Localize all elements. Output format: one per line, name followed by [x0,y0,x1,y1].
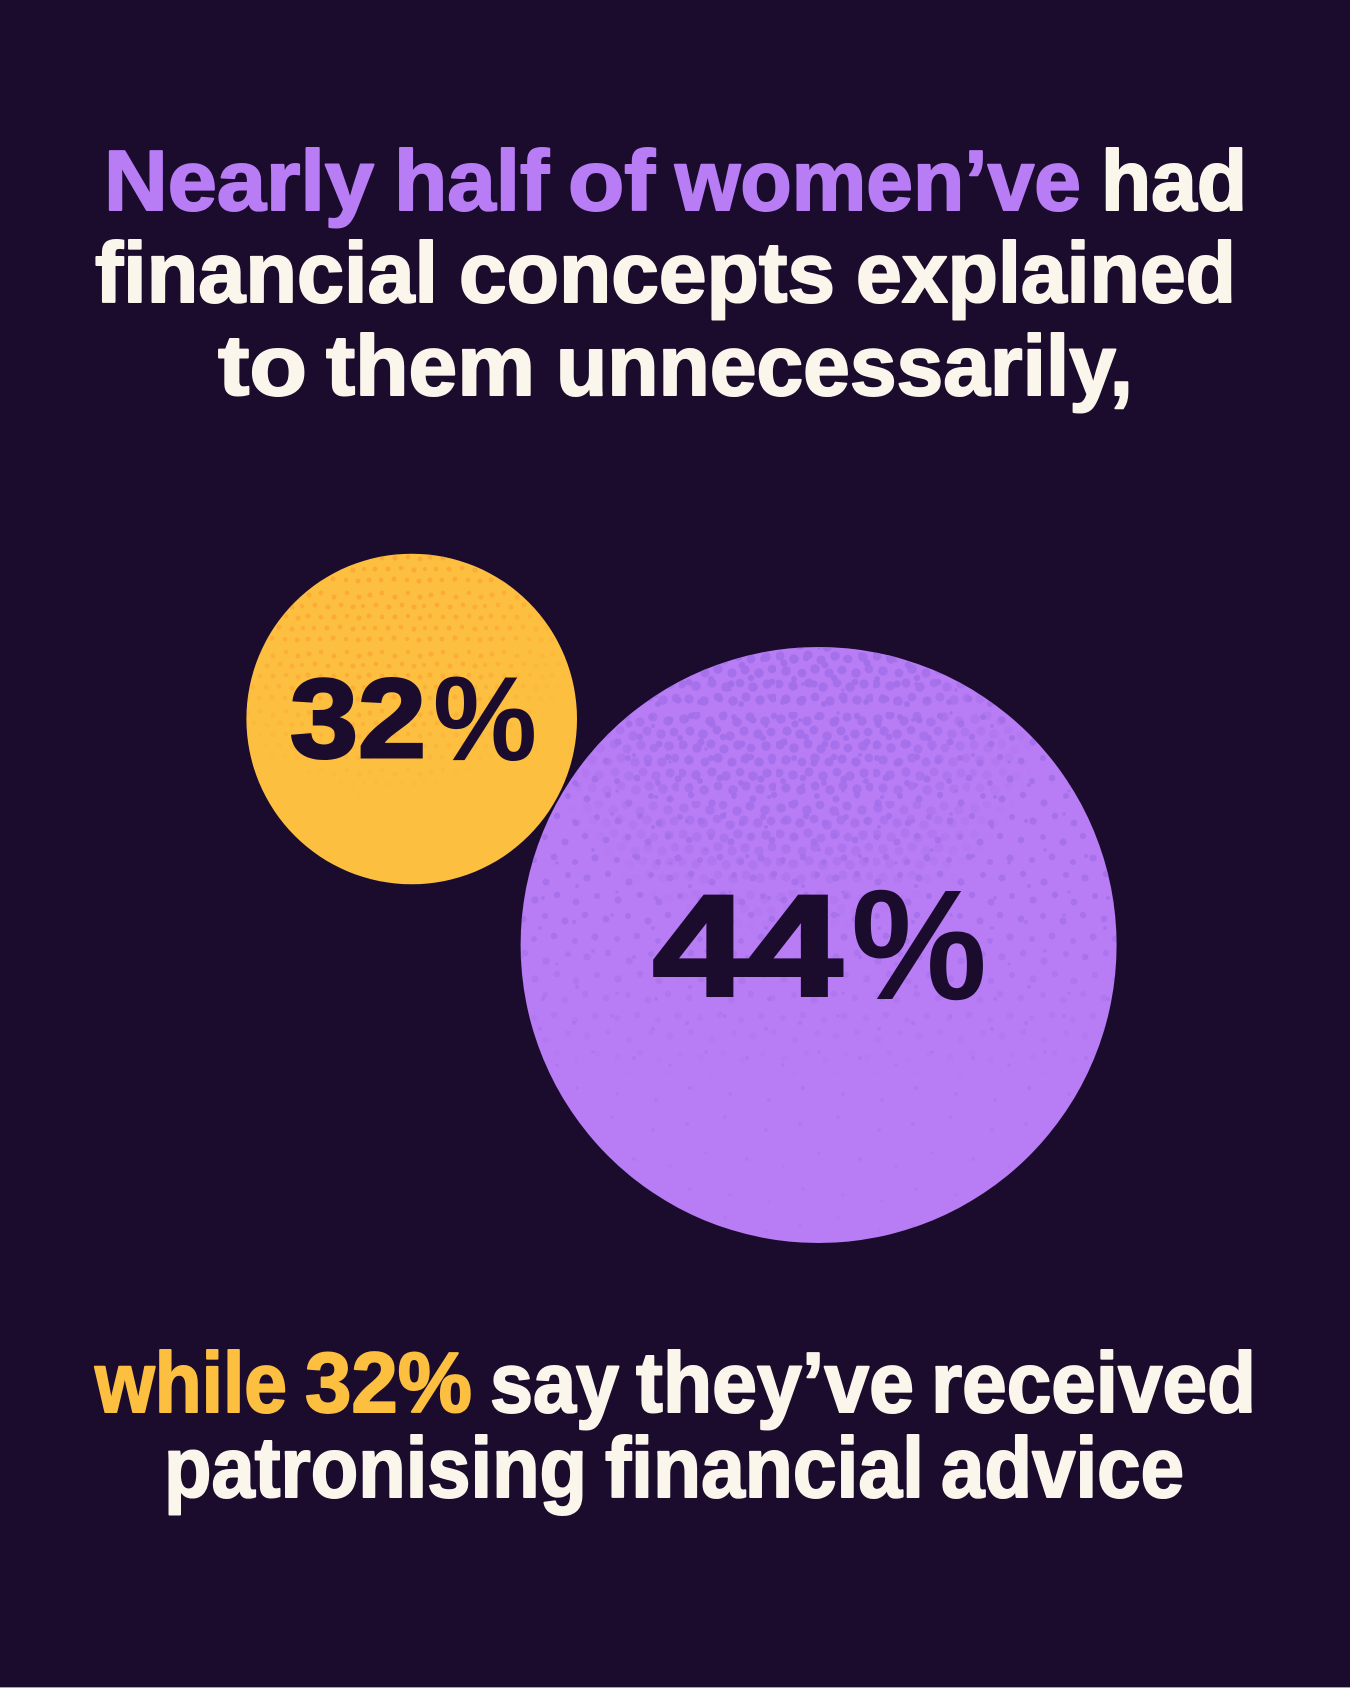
heading: top statement: women’ve [674,134,1081,229]
heading: top statement: Nearly [104,134,374,229]
heading: bottom statement: they’ve [636,1336,914,1431]
heading: bottom statement: advice [941,1421,1184,1516]
label: 44 percent [653,858,987,1033]
heading: top statement: to [218,319,307,414]
circle: 32% yellow [240,550,580,890]
label: 32 percent [290,652,537,786]
heading: bottom statement [94,1336,1256,1516]
heading: bottom statement: while [94,1336,287,1431]
heading: top statement: of [568,134,656,229]
heading: top statement: half [394,134,550,229]
circle: 44% purple [520,640,1120,1250]
heading: bottom statement: patronising [164,1421,587,1516]
heading: top statement: financial [95,226,438,321]
heading: bottom statement: 32% [305,1336,472,1431]
heading: top statement: unnecessarily, [556,319,1133,414]
heading: top statement: had [1101,134,1247,229]
heading: bottom statement: say [490,1336,619,1431]
label: 44 percent: % [851,858,987,1033]
label: 32 percent: 32 [290,656,426,781]
heading: bottom statement: received [931,1336,1256,1431]
heading: top statement: them [326,319,535,414]
chart: overlapping proportional circles [240,550,1120,1250]
heading: bottom statement: financial [605,1421,924,1516]
heading: top statement [95,134,1247,414]
label: 32 percent: % [433,652,537,786]
heading: top statement: explained [856,226,1236,321]
label: 44 percent: 44 [653,867,842,1026]
heading: top statement: concepts [459,226,835,321]
